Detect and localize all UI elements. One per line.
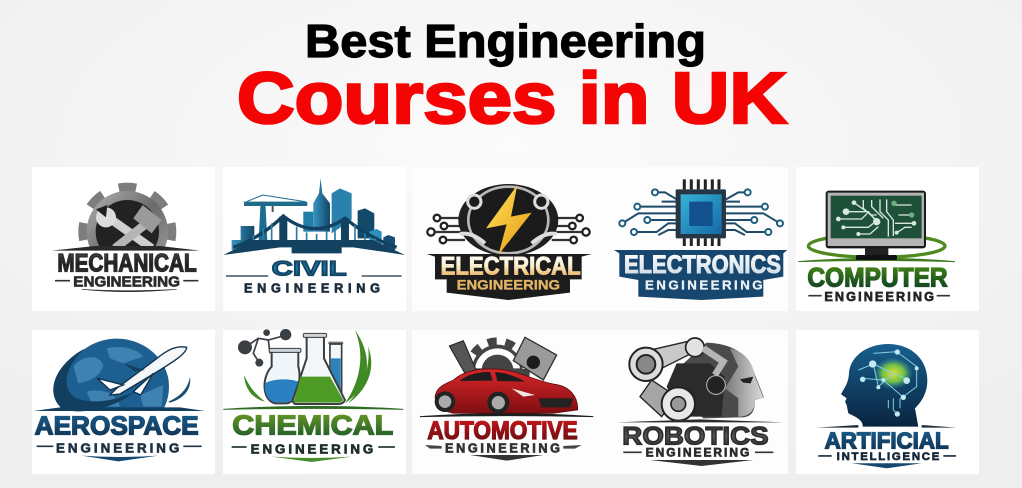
label: Computer Engineering: ENGINEERING xyxy=(824,290,934,304)
heading line: Best Engineering: Best Engineering xyxy=(305,15,706,67)
icon: laboratory glassware with molecule xyxy=(223,329,403,409)
icon: head with glowing neural brain xyxy=(817,344,957,428)
banner with label: ELECTRICAL xyxy=(441,254,581,281)
icon: red sports car, piston and gear xyxy=(420,337,593,417)
label: Aerospace Engineering xyxy=(35,411,202,461)
panel: Chemical Engineering xyxy=(223,329,406,474)
heading line: Courses in UK: Courses in UK xyxy=(237,59,787,139)
panel: Aerospace Engineering xyxy=(32,330,215,474)
icon: monitor with circuit board xyxy=(798,191,955,262)
icon: lightning bolt in circuit circle xyxy=(427,184,590,256)
banner with label: ELECTRONICS xyxy=(624,252,781,279)
label: Robotics Engineering: ROBOTICS xyxy=(622,423,769,451)
label: Aerospace Engineering: AEROSPACE xyxy=(35,411,199,441)
icon: skyline, crane and bridge xyxy=(223,178,405,255)
label: Artificial Intelligence xyxy=(818,427,956,468)
panel: Mechanical Engineering xyxy=(32,167,215,311)
panel: Computer Engineering xyxy=(796,167,979,311)
card xyxy=(796,167,979,311)
label: Civil Engineering: CIVIL xyxy=(272,256,347,280)
label: Computer Engineering xyxy=(807,262,950,304)
label: Chemical Engineering: ENGINEERING xyxy=(251,441,373,456)
label: Automotive Engineering xyxy=(425,418,582,461)
label: Civil Engineering xyxy=(226,256,402,295)
panel: white band behind centre logos, row 2 xyxy=(412,330,788,474)
label: Mechanical Engineering: MECHANICAL xyxy=(57,249,197,277)
label: Robotics Engineering: ENGINEERING xyxy=(646,446,749,460)
label: Automotive Engineering: ENGINEERING xyxy=(445,441,560,455)
icon: robot head with mechanical arm xyxy=(617,338,783,422)
banner with label xyxy=(427,254,592,300)
panel: Electronics Engineering xyxy=(614,179,787,300)
panel: white band behind centre logos, row 1 xyxy=(412,167,788,311)
panel: Robotics Engineering xyxy=(617,338,783,466)
card xyxy=(796,330,979,474)
banner with label: ENGINEERING xyxy=(645,277,763,292)
panel: Automotive Engineering xyxy=(420,337,593,461)
label: Chemical Engineering xyxy=(232,410,395,462)
label: Computer Engineering: COMPUTER xyxy=(807,262,948,292)
label: Artificial Intelligence: INTELLIGENCE xyxy=(837,451,940,463)
icon: microchip with traces xyxy=(619,179,783,246)
label: Mechanical Engineering: ENGINEERING xyxy=(73,275,180,291)
icon: globe with plane xyxy=(33,339,205,411)
panel: Civil Engineering xyxy=(223,167,406,311)
label: Automotive Engineering: AUTOMOTIVE xyxy=(427,418,578,445)
panel: Electrical Engineering xyxy=(427,184,592,300)
banner with label: ENGINEERING xyxy=(457,276,560,292)
label: Robotics Engineering xyxy=(622,423,773,466)
panel: Artificial Intelligence xyxy=(796,330,979,474)
icon: gear with wrench and bolt xyxy=(50,188,203,293)
title xyxy=(237,15,787,139)
card xyxy=(32,167,215,311)
label: Artificial Intelligence: ARTIFICIAL xyxy=(825,427,949,453)
label: Civil Engineering: ENGINEERING xyxy=(244,281,380,295)
label: Aerospace Engineering: ENGINEERING xyxy=(56,440,179,455)
banner with label xyxy=(614,250,787,300)
card xyxy=(223,330,406,474)
card xyxy=(32,330,215,474)
label: Mechanical Engineering xyxy=(55,249,198,292)
label: Chemical Engineering: CHEMICAL xyxy=(232,410,393,441)
card xyxy=(223,167,406,311)
